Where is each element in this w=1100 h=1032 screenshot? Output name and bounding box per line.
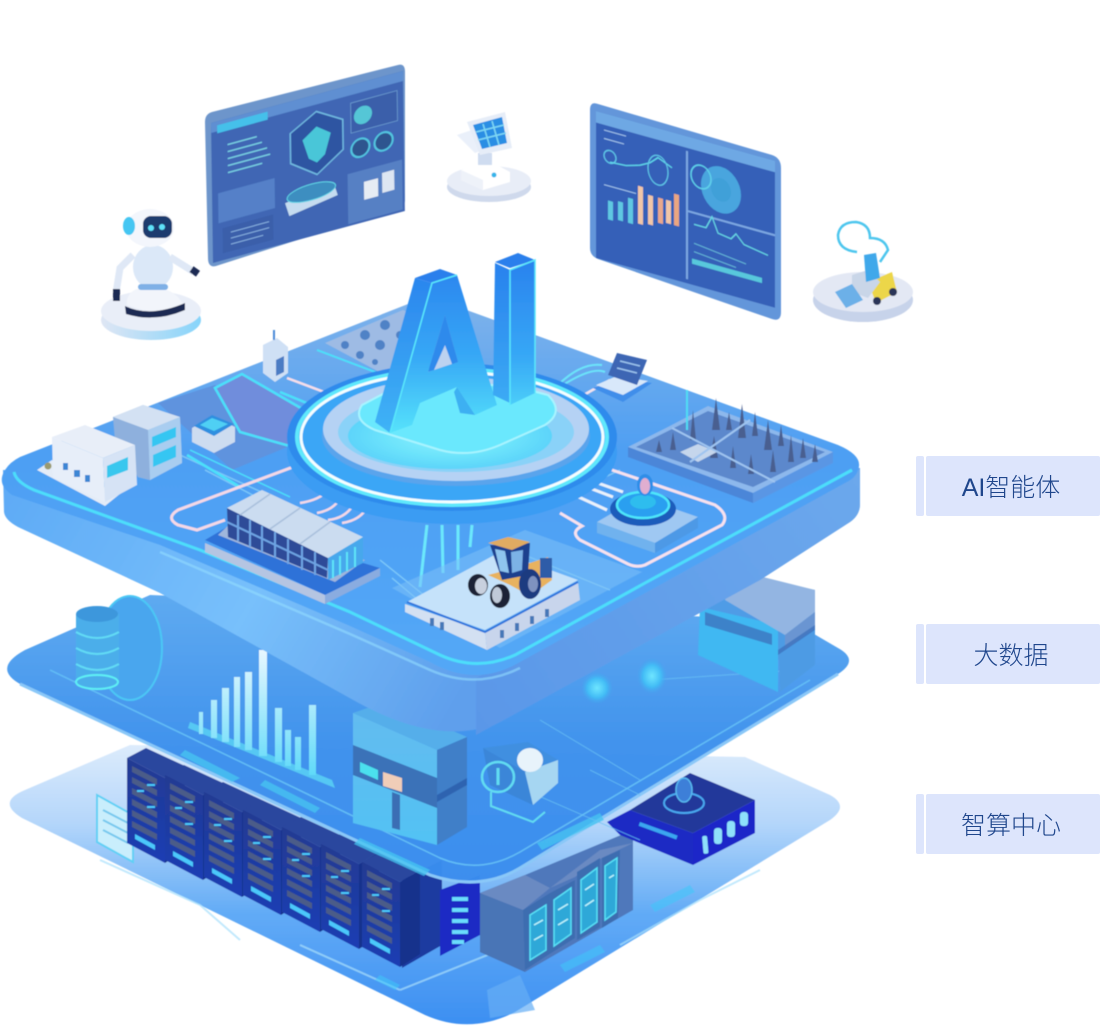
- label: AI智能体: [916, 456, 1100, 516]
- storage stack: [353, 702, 467, 845]
- circuit wires left: [172, 467, 368, 530]
- AI letters: [375, 253, 535, 433]
- label: 智算中心: 智算中心: [961, 812, 1061, 840]
- label: 大数据: 大数据: [973, 642, 1048, 670]
- sensor device: [482, 742, 558, 822]
- database cylinder: [76, 596, 162, 700]
- data glow dots: [581, 658, 667, 704]
- screen panel beside racks: [97, 795, 133, 862]
- tractor: [468, 537, 552, 608]
- rear map tile: [317, 310, 470, 375]
- server block: [205, 490, 380, 604]
- central wires: [420, 525, 472, 587]
- beacon pedestal with wires: [560, 470, 725, 566]
- monitor: left dashboard: [205, 65, 405, 266]
- left appliance boxes: [37, 405, 235, 506]
- letter I: [493, 253, 535, 405]
- grey server cabinets: [480, 830, 633, 972]
- stacked boxes right: [698, 570, 815, 692]
- antenna device: [263, 330, 288, 382]
- spike city tile: [628, 390, 833, 503]
- robotic arm on pedestal: [813, 222, 913, 322]
- glowing panel: [440, 875, 480, 956]
- layer: AI agents platform: [2, 253, 860, 735]
- kiosk on pedestal: [447, 112, 531, 202]
- layer: computing centre: [10, 745, 840, 1024]
- tractor tile: [392, 530, 642, 650]
- label: 大数据: [916, 624, 1100, 684]
- label: 智算中心: [916, 794, 1100, 854]
- robot on pedestal: [101, 209, 201, 340]
- circuit tile and channels: [158, 374, 360, 497]
- server racks: [127, 748, 442, 968]
- letter A: [375, 269, 497, 433]
- bar chart: [188, 650, 335, 788]
- laptop terminal: [548, 353, 652, 402]
- monitor: right dashboard: [590, 103, 781, 320]
- blue router cube: [607, 773, 755, 865]
- label: AI智能体: AI智能体: [962, 474, 1060, 502]
- central ring platform: [287, 363, 617, 524]
- layer: big data: [7, 570, 849, 882]
